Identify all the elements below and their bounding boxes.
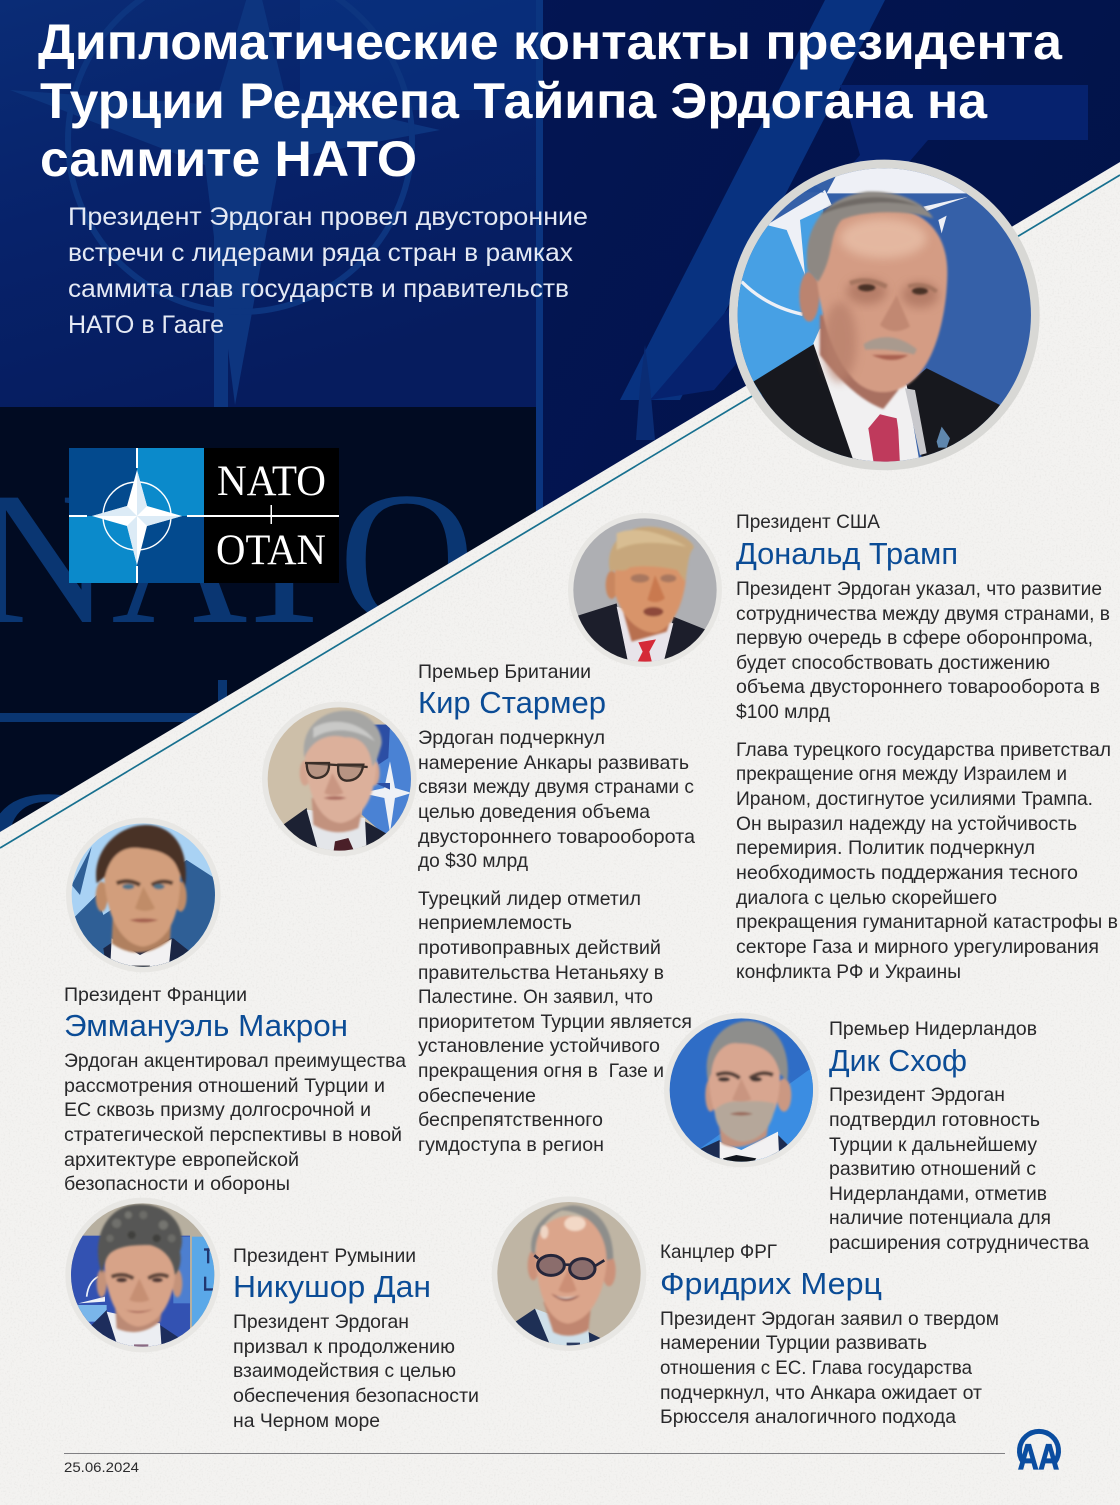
role: Merz: Канцлер ФРГ <box>660 1241 777 1263</box>
logo: NATO OTAN: OTAN <box>216 527 326 574</box>
subtitle <box>68 203 588 339</box>
text: Trump paragraph 2: необходимость поддержания тесного <box>736 862 1078 884</box>
text: Merz: отношения с ЕС. Глава государства <box>660 1357 972 1379</box>
name: Macron: Эммануэль Макрон <box>64 1008 348 1043</box>
text: Schoof: Президент Эрдоган <box>829 1084 1005 1106</box>
text: Starmer paragraph 2 <box>418 888 692 1156</box>
portrait: Trump <box>568 513 722 667</box>
text: Starmer paragraph 1: двустороннего товарооборота <box>418 826 695 848</box>
block: Trump <box>736 511 1118 983</box>
role: Macron: Президент Франции <box>64 984 247 1006</box>
text: Dan: взаимодействия с целью <box>233 1360 456 1382</box>
text: Starmer paragraph 1: связи между двумя странами с <box>418 776 694 798</box>
text: Dan: призвал к продолжению <box>233 1336 455 1358</box>
text: Schoof <box>829 1084 1089 1254</box>
text: Trump paragraph 2: прекращения гуманитарной катастрофы в <box>736 911 1118 933</box>
footer rule <box>64 1452 1005 1454</box>
text: Macron: архитектуре европейской <box>64 1149 299 1171</box>
text: Macron: рассмотрения отношений Турции и <box>64 1075 385 1097</box>
text: Dan: обеспечения безопасности <box>233 1385 479 1407</box>
text: Starmer paragraph 2: прекращения огня в Газе и <box>418 1060 664 1082</box>
text: Merz: Брюсселя аналогичного подхода <box>660 1406 956 1428</box>
block: Dan <box>233 1245 479 1432</box>
text: Macron: Эрдоган акцентировал преимущества <box>64 1050 406 1072</box>
text: Starmer paragraph 1: Эрдоган подчеркнул <box>418 727 605 749</box>
role: Starmer: Премьер Британии <box>418 661 591 683</box>
name: Trump: Дональд Трамп <box>736 536 958 571</box>
text: Starmer paragraph 2: обеспечение <box>418 1085 536 1107</box>
role: Dan: Президент Румынии <box>233 1245 416 1267</box>
subtitle: НАТО в Гааге <box>68 311 224 339</box>
text: Schoof: наличие потенциала для <box>829 1207 1051 1229</box>
subtitle: встречи с лидерами ряда стран в рамках <box>68 239 574 267</box>
text: Starmer paragraph 2: беспрепятственного <box>418 1109 603 1131</box>
text: Dan <box>233 1311 479 1432</box>
portrait: Merz <box>492 1196 646 1351</box>
text: Starmer paragraph 1: до $30 млрд <box>418 850 529 872</box>
text: Trump paragraph 1: объема двустороннего товарооборота в <box>736 676 1100 698</box>
text: Merz <box>660 1308 999 1428</box>
text: Macron: стратегической перспективы в новой <box>64 1124 402 1146</box>
portrait: Dan <box>65 1198 222 1352</box>
text: Trump paragraph 1: первую очередь в сфере оборонпрома, <box>736 627 1093 649</box>
text: Trump paragraph 2: прекращение огня между Израилем и <box>736 763 1067 785</box>
date: 25.06.2024 <box>64 1459 139 1475</box>
background: dark blue header with NATO motifs <box>0 0 1120 832</box>
text: Schoof: Нидерландами, отметив <box>829 1183 1047 1205</box>
title <box>38 14 1063 187</box>
role: Trump: Президент США <box>736 511 880 533</box>
text: Trump paragraph 2 <box>736 739 1118 983</box>
text: Schoof: подтвердил готовность <box>829 1109 1040 1131</box>
block: Macron <box>64 984 406 1195</box>
text: Starmer paragraph 2: правительства Нетаньяху в <box>418 962 664 984</box>
text: Macron: безопасности и обороны <box>64 1173 290 1195</box>
subtitle: Президент Эрдоган провел двусторонние <box>68 203 588 231</box>
portrait: Erdogan <box>729 160 1040 470</box>
portrait: Starmer <box>262 702 417 856</box>
text: Starmer paragraph 2: гумдоступа в регион <box>418 1134 604 1156</box>
text: Trump paragraph 1: $100 млрд <box>736 701 831 723</box>
name: Dan: Никушор Дан <box>233 1269 431 1304</box>
name: Starmer: Кир Стармер <box>418 685 606 720</box>
portrait: Macron <box>66 818 221 972</box>
text: Trump paragraph 1: будет способствовать достижению <box>736 652 1050 674</box>
text: Trump paragraph 2: перемирия. Политик подчеркнул <box>736 837 1035 859</box>
block: Starmer <box>418 661 695 1156</box>
text: Trump paragraph 2: Он выразил надежду на устойчивость <box>736 813 1077 835</box>
text: Macron <box>64 1050 406 1195</box>
text: Schoof: развитию отношений с <box>829 1158 1036 1180</box>
icon: AA logo: AA <box>1018 1438 1059 1477</box>
text: Dan: на Черном море <box>233 1410 380 1432</box>
text: Starmer paragraph 2: неприемлемость <box>418 912 572 934</box>
text: Trump paragraph 2: диалога с целью скорейшего <box>736 887 997 909</box>
logo: NATO OTAN: NATO <box>217 458 326 505</box>
name: Schoof: Дик Схоф <box>829 1043 967 1078</box>
text: Starmer paragraph 1: целью доведения объема <box>418 801 650 823</box>
title: Дипломатические контакты президента <box>38 14 1063 70</box>
text: Trump paragraph 1: сотрудничества между двумя странами, в <box>736 603 1110 625</box>
text: Macron: ЕС сквозь призму долгосрочной и <box>64 1099 371 1121</box>
text: Trump paragraph 1 <box>736 578 1110 723</box>
text: Dan: Президент Эрдоган <box>233 1311 409 1333</box>
block: Merz <box>660 1241 999 1428</box>
diagonal teal line <box>0 175 1120 848</box>
subtitle: саммита глав государств и правительств <box>68 275 569 303</box>
text: Merz: подчеркнул, что Анкара ожидает от <box>660 1382 982 1404</box>
text: Schoof: Турции к дальнейшему <box>829 1134 1037 1156</box>
text: Starmer paragraph 1: намерение Анкары развивать <box>418 752 689 774</box>
text: Trump paragraph 2: конфликта РФ и Украины <box>736 961 961 983</box>
text: Starmer paragraph 1 <box>418 727 695 872</box>
logo: NATO OTAN <box>69 448 339 583</box>
text: Schoof: расширения сотрудничества <box>829 1232 1089 1254</box>
text: Starmer paragraph 2: приоритетом Турции является <box>418 1011 692 1033</box>
text: Trump paragraph 2: секторе Газа и мирного урегулирования <box>736 936 1099 958</box>
text: Starmer paragraph 2: установление устойчивого <box>418 1035 660 1057</box>
portrait: Schoof <box>664 1013 819 1167</box>
text: Trump paragraph 2: Ираном, достигнутое усилиями Трампа. <box>736 788 1093 810</box>
block: Schoof <box>829 1018 1089 1254</box>
title: саммите НАТО <box>40 131 417 187</box>
text: Merz: Президент Эрдоган заявил о твердом <box>660 1308 999 1330</box>
text: Starmer paragraph 2: Палестине. Он заявил, что <box>418 986 653 1008</box>
text: Merz: намерении Турции развивать <box>660 1332 927 1354</box>
title: Турции Реджепа Тайипа Эрдогана на <box>40 73 988 129</box>
text: Trump paragraph 1: Президент Эрдоган указал, что развитие <box>736 578 1102 600</box>
role: Schoof: Премьер Нидерландов <box>829 1018 1037 1040</box>
text: Trump paragraph 2: Глава турецкого государства приветствал <box>736 739 1111 761</box>
name: Merz: Фридрих Мерц <box>660 1266 882 1301</box>
text: Starmer paragraph 2: Турецкий лидер отметил <box>418 888 641 910</box>
text: Starmer paragraph 2: противоправных действий <box>418 937 661 959</box>
